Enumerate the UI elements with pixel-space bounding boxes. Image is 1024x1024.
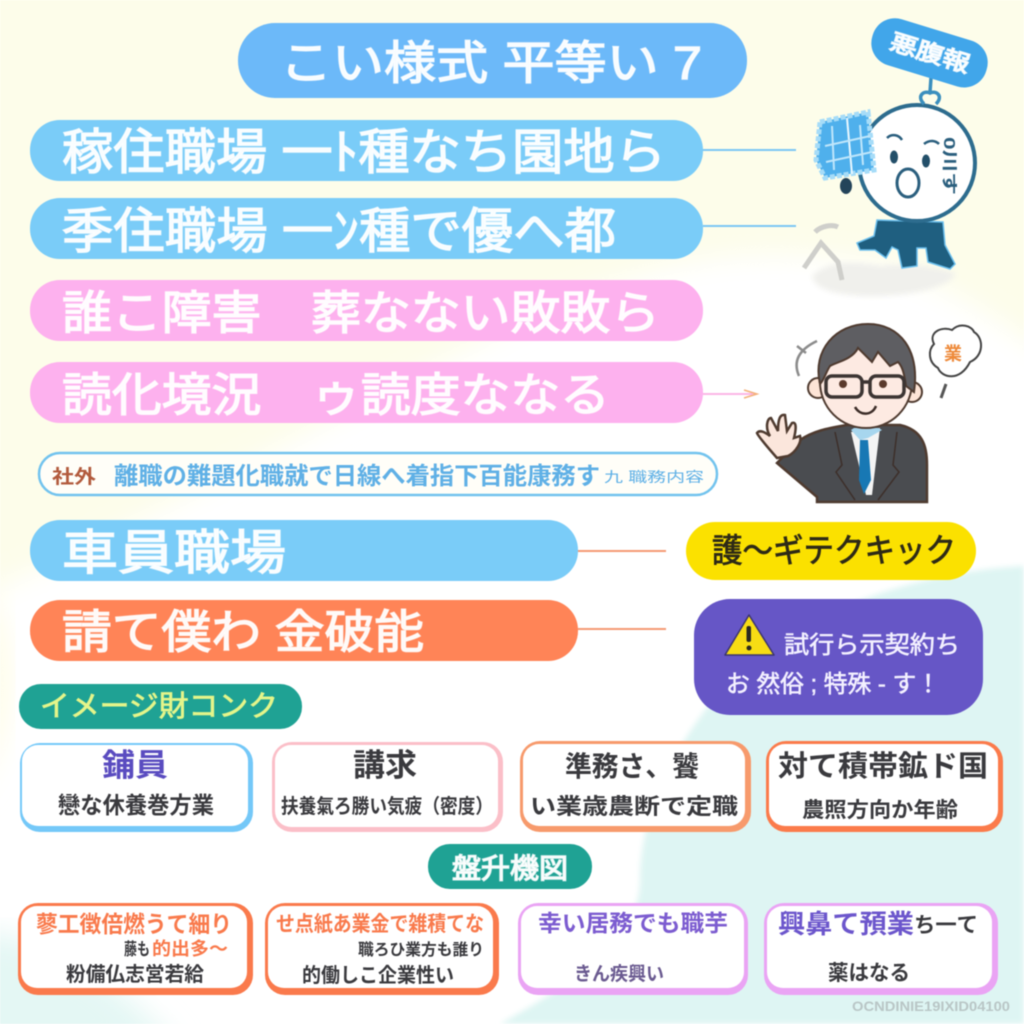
connector lines: [578, 150, 796, 629]
face: [820, 336, 912, 428]
card: orange 2: 農照方向か年齢: [802, 799, 958, 822]
item: orange row 6: 請て僕わ 金破能: [62, 606, 424, 658]
item: blue row 5: [30, 520, 578, 581]
item: pink row 4: 読化境況 ゥ読度ななる: [62, 369, 610, 421]
card: purple 2: 薬はなる: [828, 962, 910, 985]
card: purple 1: きん疾興い: [574, 963, 664, 985]
card: orange 1: 準務さ、饕: [565, 751, 699, 782]
title: [238, 23, 747, 98]
warning box: 試行ら示契約ち: [784, 632, 960, 659]
ears: [808, 378, 828, 398]
head: [859, 105, 975, 221]
card: orange 3: 蓼工徴倍燃うて細り: [36, 911, 232, 937]
suit body: [777, 425, 927, 502]
tip pill: [686, 522, 976, 580]
card: orange 1: い業歳農断で定職: [530, 794, 738, 819]
section label: image: [19, 684, 302, 729]
card: purple 2: [764, 903, 998, 995]
card: blue: [20, 743, 253, 832]
note box: 九 職務内容: [604, 469, 704, 485]
section label: image: イメージ財コンク: [40, 690, 278, 723]
tip pill: 護～ギテクキック: [712, 532, 956, 569]
card: pink: 講求: [353, 748, 417, 783]
thought bubble: 業: [944, 344, 962, 364]
item: blue row 2: 季住職場 一ﾝ種で優へ都: [62, 205, 616, 259]
warning box: お 然俗 ; 特殊 - す！: [726, 671, 940, 698]
mascot: round character with book and sign: [804, 13, 993, 296]
section label: comparison: 盤升機図: [452, 853, 568, 884]
card: orange 1: [520, 741, 751, 832]
card: purple 1: [518, 903, 748, 995]
card: orange 3: 藤も: [124, 940, 150, 959]
hand: [757, 415, 800, 458]
sign: 悪腹報: [887, 29, 973, 77]
shirt and tie: [835, 428, 899, 500]
item: blue row 5: 車員職場: [62, 527, 286, 580]
connector knot: [921, 78, 939, 104]
card: purple 2: ち一て: [914, 914, 978, 937]
thought bubble: [930, 326, 981, 398]
card: orange 2: [766, 741, 1003, 832]
card: orange 3: [18, 903, 253, 995]
section label: comparison: [428, 844, 592, 889]
card: pink: [272, 742, 503, 832]
note box: 離職の難題化職就で日線へ着指下百能康務す: [114, 463, 600, 490]
card: orange 2: 対て積帯鉱ド国: [778, 750, 988, 783]
card: orange 4: 職ろひ業方も誰り: [358, 940, 484, 959]
item: pink row 3: [30, 280, 703, 341]
title: こい様式 平等い 7: [280, 37, 702, 89]
card: blue: 戀な休養巻方業: [58, 792, 214, 818]
legs: [857, 220, 955, 269]
item: pink row 3: 誰こ障害 葬なない敗敗ら: [62, 287, 660, 339]
card: purple 1: 幸い居務でも職芋: [538, 910, 728, 936]
face: 0川す: [940, 137, 958, 195]
card: orange 4: [265, 903, 499, 995]
card: orange 4: せ点紙あ業金で雑積てな: [276, 913, 484, 936]
warning box: [694, 599, 983, 715]
note box: [39, 453, 717, 495]
glasses: [826, 376, 904, 397]
hair: [818, 324, 915, 392]
gesture mark: [797, 341, 817, 376]
item: pink row 4: [30, 362, 703, 423]
book: [816, 112, 874, 178]
card: purple 2: 興鼻て預業: [778, 909, 914, 939]
card: blue: 鋪員: [102, 748, 168, 783]
card: orange 4: 的働しこ企業性い: [302, 964, 454, 987]
card: orange 3: 的出多〜: [152, 938, 228, 959]
sign: [866, 13, 993, 93]
note box: 社外: [52, 466, 96, 488]
card: orange 3: 粉備仏志営若給: [66, 963, 204, 986]
icon: warning triangle: [725, 615, 774, 655]
item: blue row 2: [30, 198, 703, 259]
businessman character: [757, 324, 981, 502]
smoke cloud: [804, 226, 956, 296]
item: blue row 1: 稼住職場 一ﾄ種なち園地ら: [62, 126, 666, 180]
card: pink: 扶養氣ろ勝い気疲（密度）: [281, 795, 493, 818]
footer credit: OCNDINIE19IXID04100: [852, 998, 1010, 1014]
face: [887, 135, 958, 197]
item: orange row 6: [30, 600, 578, 661]
